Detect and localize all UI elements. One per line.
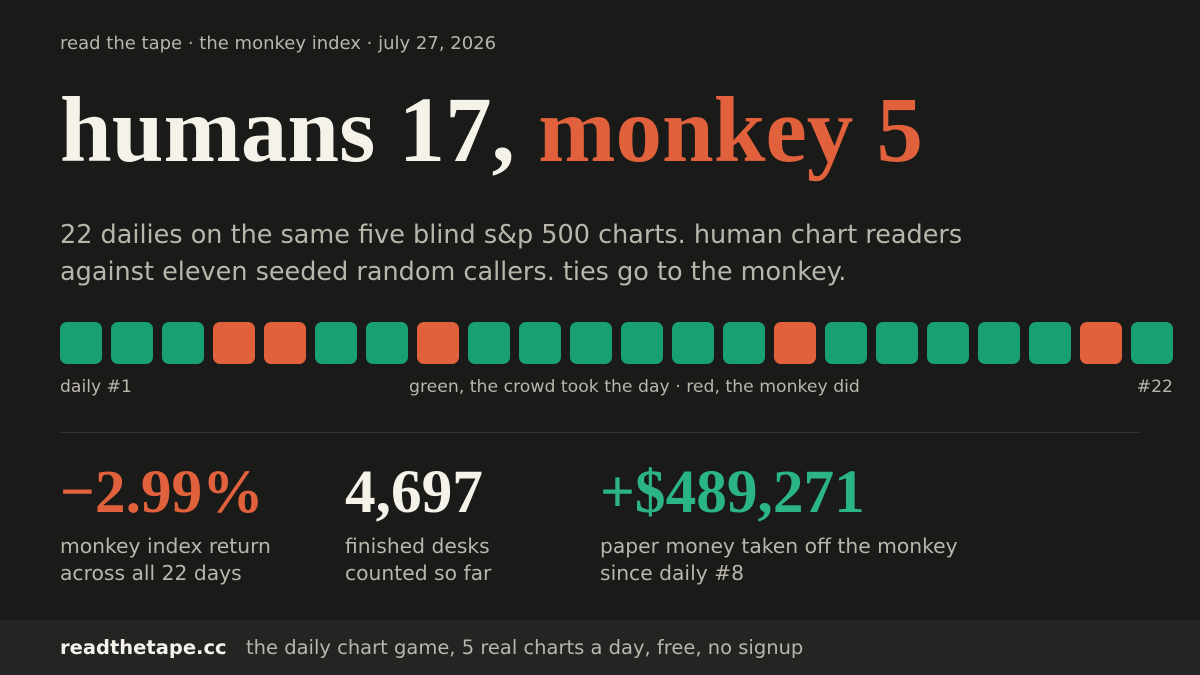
stat label xyxy=(345,534,492,585)
stat value: +$489,271 xyxy=(600,458,865,526)
stat: monkey index return xyxy=(60,458,271,585)
footer tagline: the daily chart game, 5 real charts a day, free, no signup xyxy=(246,636,803,659)
stat label xyxy=(60,534,271,585)
stat: paper money xyxy=(600,458,958,585)
eyebrow text: read the tape · the monkey index · july 27, 2026 xyxy=(60,33,496,54)
strip end label: #22 xyxy=(1137,377,1173,397)
daily results strip xyxy=(60,322,1173,364)
stat label: since daily #8 xyxy=(600,561,744,585)
stat label xyxy=(600,534,958,585)
subtitle: against eleven seeded random callers. ties go to the monkey. xyxy=(60,257,846,287)
subtitle: 22 dailies on the same five blind s&p 500 charts. human chart readers xyxy=(60,220,962,250)
strip legend: green, the crowd took the day · red, the monkey did xyxy=(409,377,860,397)
footer bar xyxy=(0,620,1200,675)
footer site name: readthetape.cc xyxy=(60,636,227,659)
stat value: 4,697 xyxy=(345,458,483,526)
title: humans 17, monkey 5 xyxy=(60,79,923,182)
subtitle xyxy=(60,220,962,287)
stat: finished desks xyxy=(345,458,492,585)
stat label: counted so far xyxy=(345,561,491,585)
stat label: paper money taken off the monkey xyxy=(600,534,958,558)
stat value: −2.99% xyxy=(60,458,264,526)
stat label: across all 22 days xyxy=(60,561,242,585)
stat label: monkey index return xyxy=(60,534,271,558)
stat label: finished desks xyxy=(345,534,490,558)
strip start label: daily #1 xyxy=(60,377,132,397)
